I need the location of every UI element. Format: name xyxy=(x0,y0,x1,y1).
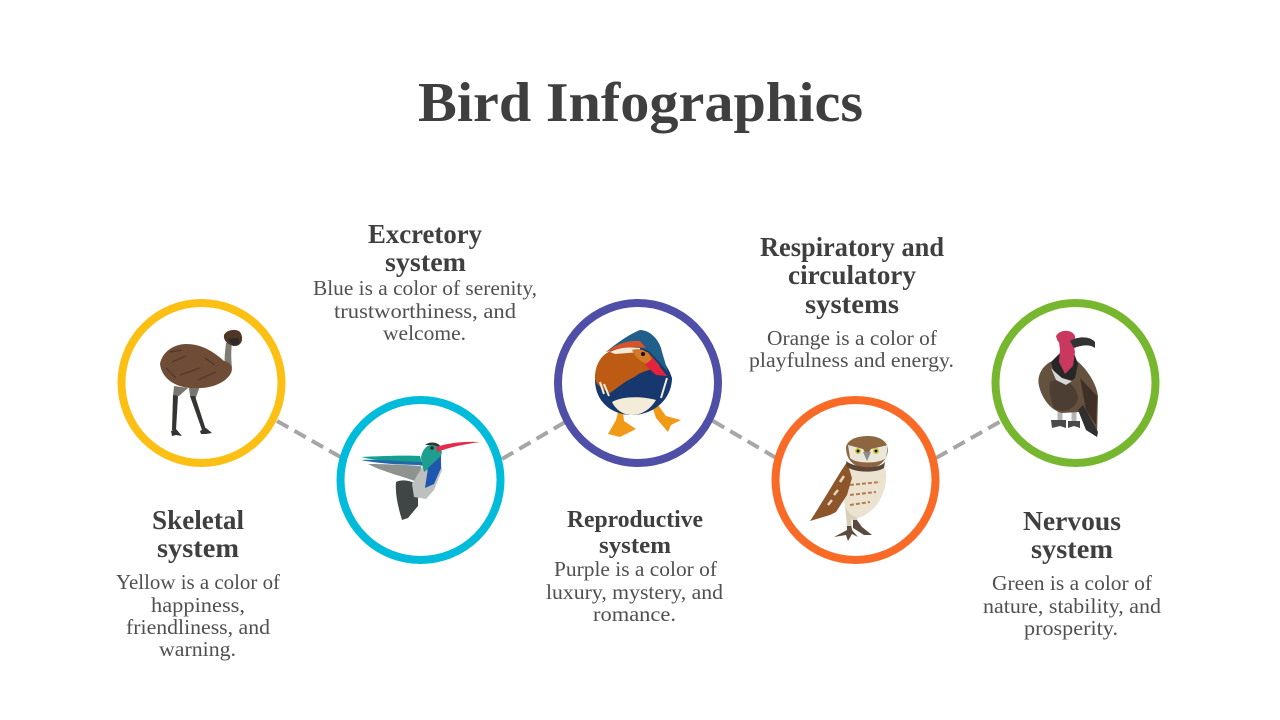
icon: mandarin duck xyxy=(595,330,681,437)
icon: emu xyxy=(160,330,242,436)
icon: hummingbird xyxy=(361,442,480,520)
text block: Respiratory and circulatory systems: systems xyxy=(805,289,899,319)
text block: Reproductive system: luxury, mystery, and xyxy=(546,580,724,604)
text block: Skeletal system: warning. xyxy=(159,637,236,661)
text block: Reproductive system: romance. xyxy=(593,602,676,626)
text block: Respiratory and circulatory systems xyxy=(749,232,954,372)
text block: Reproductive system: Reproductive xyxy=(567,507,703,533)
title: Bird Infographics xyxy=(418,72,863,134)
text block: Skeletal system: Yellow is a color of xyxy=(116,570,280,594)
text block: Nervous system: nature, stability, and xyxy=(983,594,1162,618)
circle: orange xyxy=(776,400,936,560)
text block: Skeletal system: system xyxy=(157,533,240,563)
circle: purple xyxy=(558,303,718,463)
text block: Skeletal system xyxy=(116,505,280,661)
icon: vulture xyxy=(1038,331,1098,437)
text block: Excretory system: welcome. xyxy=(383,321,466,345)
text block: Nervous system: prosperity. xyxy=(1024,616,1118,640)
text block: Excretory system: Blue is a color of serenity, xyxy=(313,276,537,300)
text block: Respiratory and circulatory systems: playfulness and energy. xyxy=(749,348,954,372)
text block: Excretory system: Excretory xyxy=(368,219,482,249)
text block: Reproductive system: system xyxy=(599,533,671,559)
circle: green xyxy=(996,303,1156,463)
text block: Skeletal system: happiness, xyxy=(151,593,245,617)
text block: Reproductive system xyxy=(546,507,724,626)
text block: Skeletal system: Skeletal xyxy=(152,505,244,535)
text block: Nervous system: Nervous xyxy=(1023,506,1121,536)
text block: Respiratory and circulatory systems: circulatory xyxy=(788,260,916,290)
text block: Skeletal system: friendliness, and xyxy=(126,615,271,639)
text block: Respiratory and circulatory systems: Orange is a color of xyxy=(767,326,937,350)
text block: Reproductive system: Purple is a color of xyxy=(554,557,717,581)
text block: Excretory system: system xyxy=(385,247,467,277)
text block: Excretory system: trustworthiness, and xyxy=(334,299,517,323)
text block: Excretory system xyxy=(313,219,537,345)
text block: Respiratory and circulatory systems: Respiratory and xyxy=(760,232,944,262)
circle: yellow xyxy=(122,303,282,463)
text block: Nervous system xyxy=(983,506,1162,640)
dashed connectors xyxy=(277,420,1003,459)
text block: Nervous system: system xyxy=(1031,534,1114,564)
circle: blue xyxy=(340,400,500,560)
icon: burrowing owl xyxy=(810,436,888,541)
text block: Nervous system: Green is a color of xyxy=(992,571,1152,595)
